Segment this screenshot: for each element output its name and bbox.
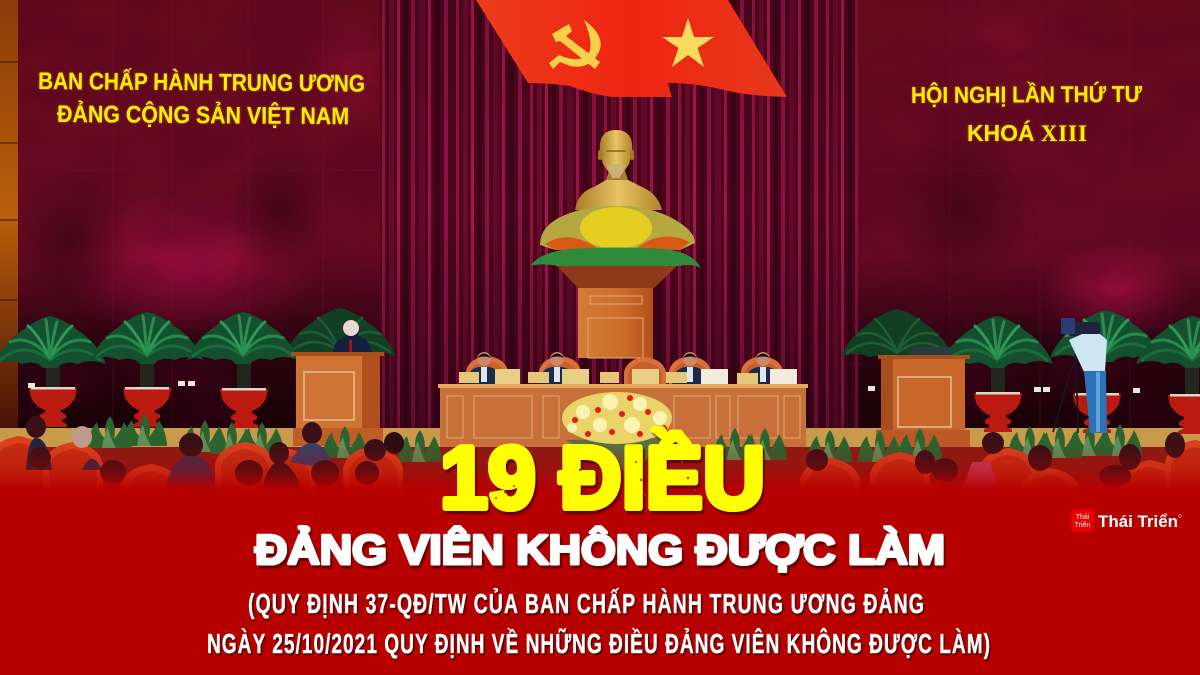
regulation line one: (QUY ĐỊNH 37-QĐ/TW CỦA BAN CHẤP HÀNH TRUNG ƯƠNG ĐẢNG [248,587,925,619]
flag with hammer, sickle and star [476,0,787,97]
Ho Chi Minh bust [575,130,662,210]
presidium table [438,384,808,450]
plants and pots left [0,308,396,428]
logo: Thai Trien [1071,509,1181,532]
right lectern [876,347,970,448]
title: 19 DIEU: 19 ĐIỀU [440,428,765,527]
central pedestal [557,266,677,358]
right heading: fourth plenum [911,80,1143,146]
right heading: fourth plenum: HỘI NGHỊ LẦN THỨ TƯ [911,80,1143,108]
subtitle: party members must not do: ĐẢNG VIÊN KHÔNG ĐƯỢC LÀM [255,525,945,573]
chairs [0,436,1200,518]
presidium seats and delegates [459,352,797,385]
right wall panel [858,0,1200,430]
flower arrangement on pedestal [530,206,701,268]
bouquet at the table [562,392,672,470]
left heading: central committee [38,67,365,130]
red fade over the lower photo [0,445,1200,495]
plants and pots right [28,309,1200,434]
icon: yellow star [662,18,714,67]
cameraman with tripod [1053,318,1107,433]
orange side wall [0,0,18,430]
audience seating [0,414,1200,518]
delegates seen from behind [26,416,1185,495]
red title band [0,495,1200,675]
stage backdrop [0,0,1200,453]
left wall panel [10,0,405,430]
left heading: central committee: ĐẢNG CỘNG SẢN VIỆT NAM [57,99,349,130]
stage floor [0,428,1200,453]
left lectern with speaker [291,320,384,446]
icon: hammer and sickle [549,20,601,69]
right heading: fourth plenum: KHOÁ XIII [967,119,1088,146]
logo: Thai Trien: Triển [1075,521,1090,529]
central velvet curtain [380,0,858,428]
logo: Thai Trien: Thái [1076,514,1090,521]
left heading: central committee: BAN CHẤP HÀNH TRUNG ƯƠNG [38,67,365,98]
logo: Thai Trien: Thái Triển [1098,512,1178,531]
planter greenery [88,414,1142,462]
